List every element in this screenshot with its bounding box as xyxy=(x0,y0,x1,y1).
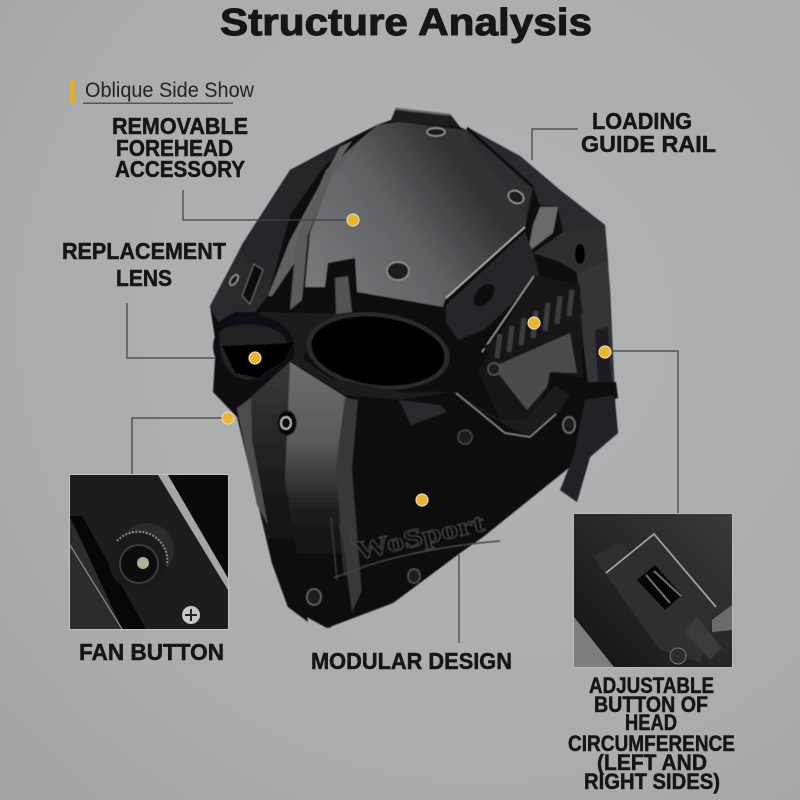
temple block xyxy=(528,207,558,252)
mask left light panel xyxy=(237,362,350,628)
left lens rim xyxy=(210,311,298,385)
label: adjustable button of head circumference: CIRCUMFERENCE xyxy=(568,731,735,756)
label: adjustable button of head circumference: HEAD xyxy=(625,710,677,735)
label: removable forehead accessory xyxy=(112,113,248,182)
top tab xyxy=(391,108,459,127)
side adjuster xyxy=(595,327,612,385)
helmet xyxy=(210,108,618,628)
small shell tab xyxy=(242,264,263,304)
right lens xyxy=(307,309,449,393)
label: removable forehead accessory: FOREHEAD xyxy=(116,135,233,161)
forehead plate shadow edge xyxy=(303,258,443,318)
forehead plate xyxy=(305,122,533,307)
brow arm xyxy=(446,232,540,340)
side frame xyxy=(577,260,614,400)
label: adjustable button of head circumference xyxy=(568,673,735,794)
mask left dark strip xyxy=(237,362,308,622)
label: loading guide rail: GUIDE RAIL xyxy=(581,131,716,157)
bridge xyxy=(258,312,345,372)
label: adjustable button of head circumference: RIGHT SIDES) xyxy=(584,769,720,794)
label: fan button: FAN BUTTON xyxy=(79,639,224,665)
watermark xyxy=(331,508,500,580)
label: removable forehead accessory: REMOVABLE xyxy=(112,113,248,139)
helmet silhouette xyxy=(210,108,618,628)
guide rail xyxy=(483,287,583,363)
label: adjustable button of head circumference: ADJUSTABLE xyxy=(589,673,714,698)
side temple panel xyxy=(478,275,583,437)
left shell panel xyxy=(210,130,370,322)
inset photo: fan button xyxy=(69,474,229,630)
screws xyxy=(228,128,575,605)
label: replacement lens: REPLACEMENT xyxy=(62,238,226,264)
label: adjustable button of head circumference: BUTTON OF xyxy=(594,692,708,717)
callout lines xyxy=(127,129,678,643)
label: adjustable button of head circumference: (LEFT AND xyxy=(597,750,707,775)
right lens rim xyxy=(302,305,454,397)
label: replacement lens: LENS xyxy=(116,265,172,291)
title: Structure Analysis xyxy=(220,2,592,44)
label: loading guide rail xyxy=(581,108,716,157)
label: modular design: MODULAR DESIGN xyxy=(311,648,512,674)
left lens xyxy=(219,324,288,380)
watermark: WoSport xyxy=(352,508,487,566)
label: replacement lens xyxy=(62,238,226,291)
forehead rim highlight xyxy=(290,127,375,310)
section heading: oblique side show: Oblique Side Show xyxy=(85,79,255,102)
label: loading guide rail: LOADING xyxy=(592,108,692,134)
label: removable forehead accessory: ACCESSORY xyxy=(115,156,245,182)
nose clip xyxy=(335,276,352,314)
mask lower black panel xyxy=(352,398,570,603)
lower jaw tab xyxy=(560,395,618,502)
mask eye ridge xyxy=(290,355,570,437)
callout dots xyxy=(222,214,611,506)
inset photo: adjustable button xyxy=(573,513,733,668)
rear shell xyxy=(467,127,605,232)
mask centre seam xyxy=(336,398,362,612)
forehead side strip xyxy=(272,125,377,312)
